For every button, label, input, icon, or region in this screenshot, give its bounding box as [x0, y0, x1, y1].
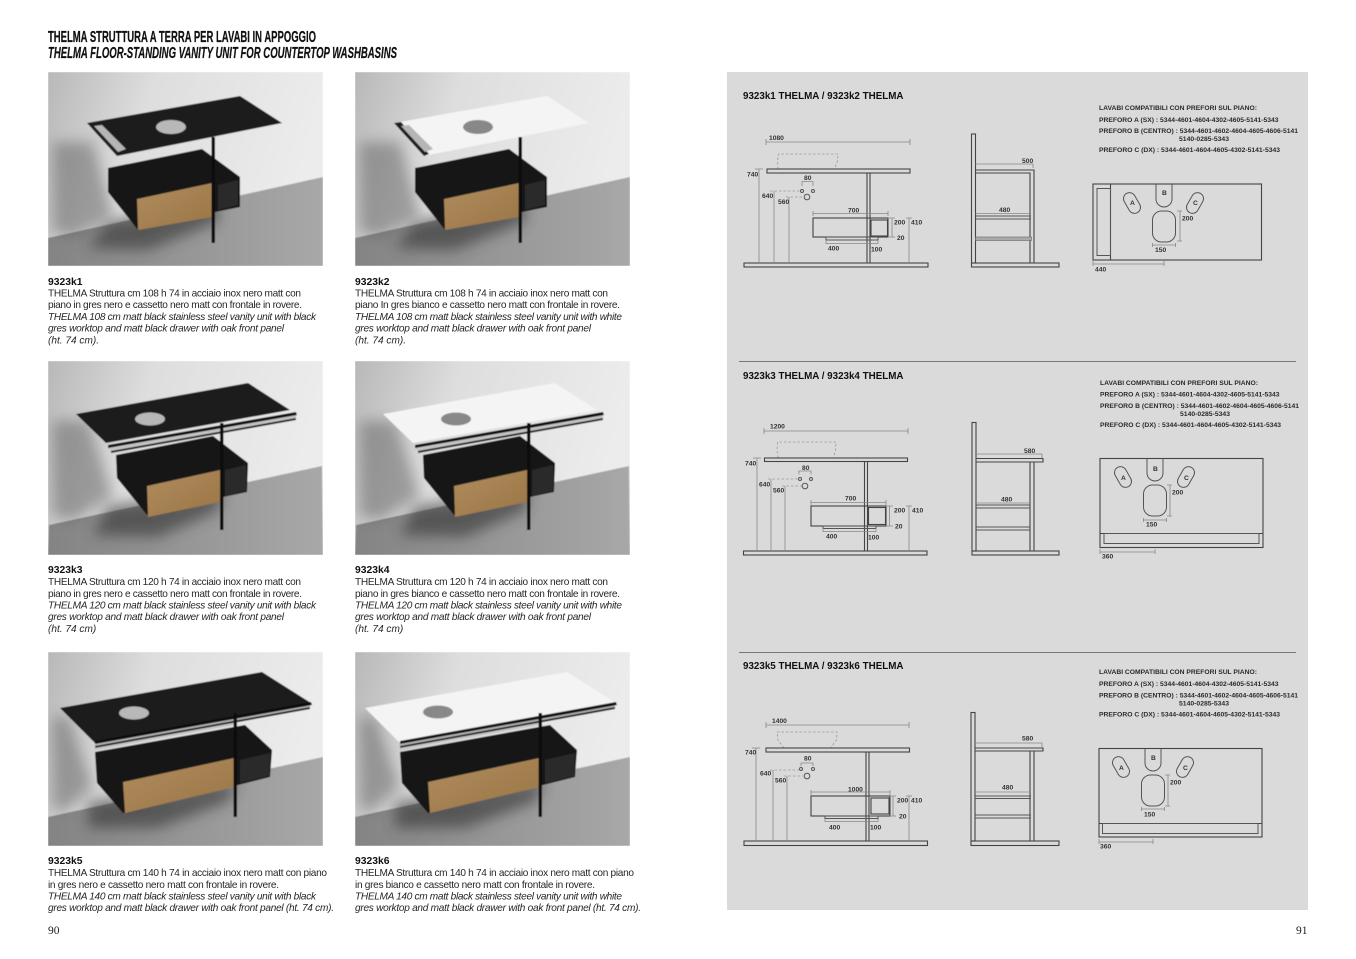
- plan drawing: A: [1121, 475, 1126, 482]
- compatibility notes: LAVABI COMPATIBILI CON PREFORI SUL PIANO:: [1099, 105, 1257, 112]
- text: 9323k1: [48, 277, 317, 346]
- title: [48, 29, 397, 62]
- front elevation drawing: 200: [894, 220, 905, 226]
- plan drawing: C: [1183, 765, 1188, 772]
- plan drawing: C: [1193, 200, 1198, 207]
- text: 9323k6: THELMA 140 cm matt black stainless steel vanity unit with white: [355, 892, 622, 902]
- plan drawing: 200: [1172, 490, 1183, 496]
- text: 9323k3: THELMA Struttura cm 120 h 74 in acciaio inox nero matt con: [48, 577, 301, 588]
- front elevation drawing: [744, 718, 928, 846]
- text: 9323k1: THELMA Struttura cm 108 h 74 in acciaio inox nero matt con: [48, 288, 301, 300]
- compatibility notes: LAVABI COMPATIBILI CON PREFORI SUL PIANO:: [1100, 380, 1258, 387]
- front elevation drawing: 740: [747, 172, 758, 178]
- front elevation drawing: 700: [848, 208, 859, 214]
- front elevation drawing: 20: [897, 235, 905, 242]
- title: THELMA STRUTTURA A TERRA PER LAVABI IN APPOGGIO: [48, 29, 316, 46]
- text: 9323k1: 9323k1: [48, 277, 83, 288]
- side elevation drawing: 580: [1024, 448, 1035, 455]
- front elevation drawing: 100: [868, 534, 879, 542]
- side elevation drawing: 580: [1022, 736, 1033, 742]
- text: 9323k6: 9323k6: [355, 856, 390, 867]
- plan drawing: 150: [1155, 247, 1166, 254]
- text: 9323k4: [355, 565, 622, 635]
- photo: 9323k2: [355, 72, 630, 266]
- compatibility notes: PREFORO A (SX) : 5344-4601-4604-4302-4605-5141-5343: [1099, 681, 1279, 688]
- compatibility notes: [1099, 669, 1299, 718]
- plan drawing: 150: [1144, 812, 1155, 818]
- text: 9323k4: (ht. 74 cm): [355, 624, 403, 635]
- heading: 9323k3 THELMA / 9323k4 THELMA: [743, 370, 904, 382]
- text: 9323k4: THELMA 120 cm matt black stainless steel vanity unit with white: [355, 600, 622, 612]
- compatibility notes: PREFORO A (SX) : 5344-4601-4604-4302-4605-5141-5343: [1100, 392, 1280, 398]
- side elevation drawing: [972, 422, 1059, 555]
- front elevation drawing: 560: [778, 199, 789, 206]
- front elevation drawing: 20: [899, 814, 907, 820]
- compatibility notes: PREFORO A (SX) : 5344-4601-4604-4302-4605-5141-5343: [1099, 117, 1279, 124]
- front elevation drawing: 700: [845, 496, 856, 502]
- front elevation drawing: 640: [762, 193, 773, 200]
- front elevation drawing: 80: [804, 756, 812, 762]
- divider: [739, 652, 1296, 653]
- plan drawing: A: [1119, 765, 1124, 772]
- front elevation drawing: 560: [773, 488, 784, 494]
- compatibility notes: PREFORO B (CENTRO) : 5344-4601-4602-4604-4605-4606-5141: [1099, 128, 1299, 135]
- photo: 9323k3: [48, 361, 323, 555]
- compatibility notes: PREFORO B (CENTRO) : 5344-4601-4602-4604-4605-4606-5141: [1099, 692, 1299, 700]
- section: 9323k5 / 9323k6: [743, 660, 1299, 850]
- text: 9323k2: THELMA Struttura cm 108 h 74 in acciaio inox nero matt con: [355, 288, 608, 300]
- photo: 9323k6: [355, 652, 630, 846]
- front elevation drawing: 410: [911, 798, 922, 804]
- text: 9323k1: THELMA 108 cm matt black stainless steel vanity unit with black: [48, 312, 317, 323]
- plan drawing: 440: [1095, 266, 1106, 274]
- photo: 9323k1: [48, 72, 323, 266]
- plan drawing: 360: [1102, 554, 1113, 560]
- photo: 9323k5: [48, 652, 323, 846]
- text: 9323k3: [48, 565, 317, 635]
- front elevation drawing: 1080: [769, 135, 784, 142]
- divider: [739, 361, 1296, 362]
- plan drawing: C: [1184, 475, 1189, 482]
- front elevation drawing: 20: [895, 524, 903, 530]
- text: 9323k2: 9323k2: [355, 277, 390, 288]
- text: 9323k4: 9323k4: [355, 565, 390, 576]
- text: 9323k2: THELMA 108 cm matt black stainless steel vanity unit with white: [355, 312, 622, 323]
- side elevation drawing: [972, 134, 1059, 267]
- text: 9323k5: THELMA 140 cm matt black stainless steel vanity unit with black: [48, 892, 317, 902]
- front elevation drawing: 410: [911, 220, 922, 226]
- front elevation drawing: 560: [775, 778, 786, 784]
- plan drawing: 200: [1170, 780, 1181, 786]
- plan drawing: 150: [1146, 522, 1157, 528]
- text: 9323k6: gres worktop and matt black drawer with oak front panel (ht. 74 cm).: [355, 903, 641, 914]
- text: 9323k5: [48, 856, 334, 914]
- text: 9323k6: THELMA Struttura cm 140 h 74 in acciaio inox nero matt con piano: [355, 868, 634, 879]
- text: 9323k3: THELMA 120 cm matt black stainless steel vanity unit with black: [48, 600, 317, 612]
- front elevation drawing: 740: [745, 460, 756, 468]
- text: 9323k1: gres worktop and matt black drawer with oak front panel: [48, 324, 285, 334]
- text: 9323k4: gres worktop and matt black drawer with oak front panel: [355, 612, 592, 623]
- photo: 9323k4: [355, 361, 630, 555]
- section: 9323k3 / 9323k4: [743, 370, 1300, 560]
- text: 9323k1: (ht. 74 cm).: [48, 336, 99, 346]
- page number 91: 91: [1296, 925, 1308, 937]
- plan drawing: A: [1130, 200, 1135, 207]
- text: 9323k3: piano in gres nero e cassetto nero matt con frontale in rovere.: [48, 589, 302, 600]
- front elevation drawing: 400: [826, 534, 837, 540]
- text: 9323k5: in gres nero e cassetto nero matt con frontale in rovere.: [48, 880, 279, 891]
- compatibility notes: PREFORO C (DX) : 5344-4601-4604-4605-4302-5141-5343: [1099, 147, 1281, 154]
- plan drawing: B: [1153, 466, 1158, 473]
- text: 9323k1: piano in gres nero e cassetto nero matt con frontale in rovere.: [48, 300, 302, 311]
- front elevation drawing: 1200: [770, 424, 785, 430]
- text: 9323k4: THELMA Struttura cm 120 h 74 in acciaio inox nero matt con: [355, 577, 608, 588]
- front elevation drawing: 410: [912, 508, 923, 514]
- text: 9323k2: [355, 277, 622, 346]
- text: 9323k3: gres worktop and matt black drawer with oak front panel: [48, 612, 285, 623]
- compatibility notes: 5140-0285-5343: [1179, 136, 1230, 143]
- compatibility notes: 5140-0285-5343: [1180, 411, 1231, 418]
- front elevation drawing: 80: [802, 465, 810, 472]
- plan drawing: [1100, 458, 1263, 560]
- heading: 9323k5 THELMA / 9323k6 THELMA: [743, 660, 904, 672]
- compatibility notes: 5140-0285-5343: [1179, 700, 1230, 708]
- front elevation drawing: 100: [871, 246, 882, 254]
- heading: 9323k1 THELMA / 9323k2 THELMA: [743, 90, 904, 102]
- front elevation drawing: [744, 424, 927, 555]
- side elevation drawing: 480: [1002, 784, 1013, 792]
- text: 9323k4: piano in gres bianco e cassetto nero matt con frontale in rovere.: [355, 589, 620, 600]
- side elevation drawing: [971, 712, 1059, 846]
- text: 9323k3: (ht. 74 cm): [48, 624, 96, 635]
- front elevation drawing: 400: [828, 246, 839, 252]
- side elevation drawing: 500: [1022, 158, 1033, 165]
- front elevation drawing: 100: [870, 824, 881, 832]
- front elevation drawing: 640: [760, 770, 771, 778]
- front elevation drawing: 640: [759, 482, 770, 488]
- front elevation drawing: 200: [894, 508, 905, 514]
- front elevation drawing: 200: [897, 798, 908, 804]
- plan drawing: 200: [1182, 216, 1193, 222]
- side elevation drawing: 480: [999, 207, 1010, 214]
- title: THELMA FLOOR-STANDING VANITY UNIT FOR COUNTERTOP WASHBASINS: [48, 45, 397, 62]
- plan drawing: [1093, 184, 1262, 274]
- text: 9323k2: (ht. 74 cm).: [355, 336, 406, 346]
- text: 9323k3: 9323k3: [48, 565, 83, 576]
- text: 9323k2: gres worktop and matt black drawer with oak front panel: [355, 324, 592, 334]
- text: 9323k6: in gres bianco e cassetto nero matt con frontale in rovere.: [355, 880, 595, 891]
- compatibility notes: PREFORO C (DX) : 5344-4601-4604-4605-4302-5141-5343: [1100, 422, 1282, 429]
- front elevation drawing: 1400: [772, 718, 787, 725]
- text: 9323k5: 9323k5: [48, 856, 83, 867]
- compatibility notes: PREFORO B (CENTRO) : 5344-4601-4602-4604-4605-4606-5141: [1100, 403, 1300, 410]
- section: 9323k1 / 9323k2: [743, 90, 1299, 274]
- compatibility notes: [1100, 380, 1300, 429]
- front elevation drawing: 1000: [848, 786, 863, 794]
- page number 90: 90: [48, 925, 60, 937]
- front elevation drawing: 400: [829, 824, 840, 832]
- compatibility notes: [1099, 105, 1299, 154]
- compatibility notes: LAVABI COMPATIBILI CON PREFORI SUL PIANO:: [1099, 669, 1257, 676]
- text: 9323k2: piano In gres bianco e cassetto nero matt con frontale in rovere.: [355, 300, 620, 311]
- panel: technical drawings: [727, 72, 1308, 910]
- plan drawing: [1099, 748, 1262, 850]
- compatibility notes: PREFORO C (DX) : 5344-4601-4604-4605-4302-5141-5343: [1099, 712, 1281, 718]
- text: 9323k6: [355, 856, 641, 914]
- plan drawing: 360: [1100, 844, 1111, 850]
- text: 9323k5: THELMA Struttura cm 140 h 74 in acciaio inox nero matt con piano: [48, 868, 327, 879]
- plan drawing: B: [1162, 190, 1167, 197]
- front elevation drawing: 80: [804, 175, 812, 182]
- front elevation drawing: [744, 135, 928, 267]
- side elevation drawing: 480: [1001, 496, 1012, 504]
- text: 9323k5: gres worktop and matt black drawer with oak front panel (ht. 74 cm).: [48, 903, 334, 914]
- plan drawing: B: [1151, 755, 1156, 762]
- front elevation drawing: 740: [745, 750, 756, 756]
